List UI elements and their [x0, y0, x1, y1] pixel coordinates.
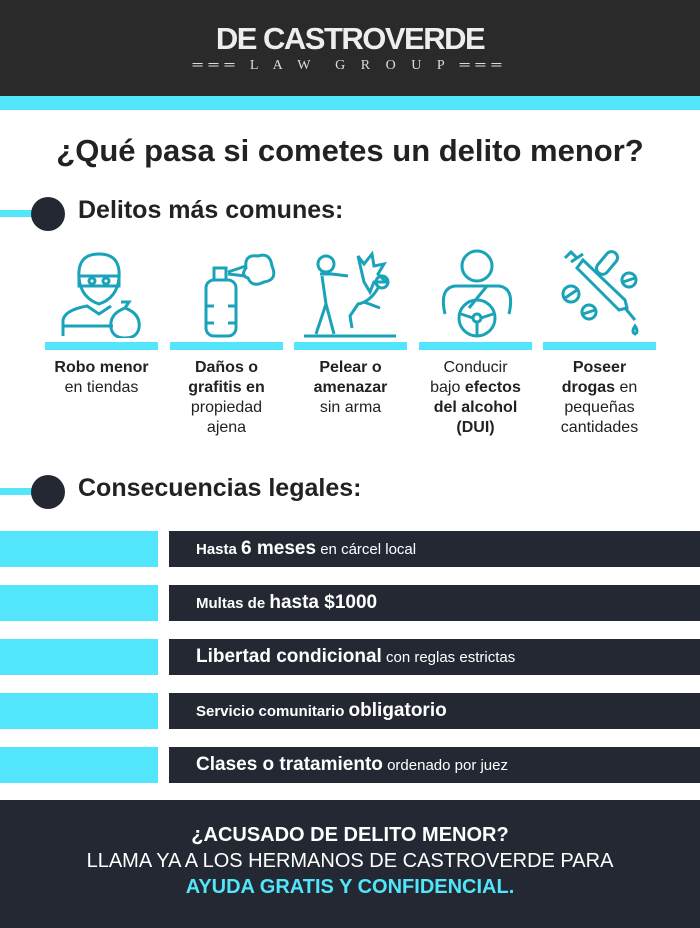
row 1: Hasta 6 meses en cárcel local: [196, 538, 416, 559]
item: drogas: [543, 250, 656, 436]
item: daños: grafitis en: [188, 379, 265, 396]
section heading: delitos: [0, 196, 343, 231]
icon: thief: [62, 252, 141, 338]
call to action: LLAMA YA A LOS HERMANOS DE CASTROVERDE PARA: [87, 850, 613, 872]
logo: ═══ L A W G R O U P ═══: [193, 58, 507, 73]
item: robo: [45, 252, 158, 396]
item: daños: Daños o: [195, 359, 258, 376]
row 2: Multas de hasta $1000: [196, 592, 377, 613]
row 1: [0, 531, 700, 567]
item: drogas: pequeñas: [564, 399, 635, 416]
section heading: consecuencias: Consecuencias legales:: [78, 474, 361, 502]
icon: syringe and pills: [562, 250, 638, 336]
item: pelear: amenazar: [314, 379, 387, 396]
item: drogas: Poseer: [573, 359, 626, 376]
item: pelear: Pelear o: [319, 359, 382, 376]
item: daños: ajena: [207, 419, 246, 436]
logo: [192, 21, 507, 73]
row 4: Servicio comunitario obligatorio: [196, 700, 447, 721]
item: daños: propiedad: [191, 399, 262, 416]
item: robo: en tiendas: [65, 379, 138, 396]
row 3: [0, 639, 700, 675]
logo: DE CASTROVERDE: [216, 21, 484, 56]
item: DUI: [419, 250, 532, 436]
footer: [0, 800, 700, 928]
item: daños: [170, 254, 283, 436]
icon: spray can: [204, 254, 276, 338]
row 3: Libertad condicional con reglas estrictas: [196, 646, 515, 667]
call to action: AYUDA GRATIS Y CONFIDENCIAL.: [186, 876, 514, 898]
item: drogas: drogas en: [562, 379, 637, 396]
item: robo: Robo menor: [54, 359, 149, 376]
call to action: [87, 824, 614, 898]
section heading: consecuencias: [0, 474, 361, 509]
item: DUI: Conducir: [443, 359, 508, 376]
row 5: Clases o tratamiento ordenado por juez: [196, 754, 508, 775]
icon: driver: [442, 250, 512, 338]
item: pelear: sin arma: [320, 399, 381, 416]
row 4: [0, 693, 700, 729]
icon: fight: [304, 250, 396, 338]
section heading: delitos: Delitos más comunes:: [78, 196, 343, 224]
header: [0, 0, 700, 96]
call to action: ¿ACUSADO DE DELITO MENOR?: [191, 824, 509, 846]
item: pelear: [294, 250, 407, 416]
item: DUI: bajo efectos: [430, 379, 521, 396]
item: DUI: del alcohol: [434, 399, 517, 416]
row 5: [0, 747, 700, 783]
item: DUI: (DUI): [456, 419, 495, 436]
item: drogas: cantidades: [561, 419, 638, 436]
row 2: [0, 585, 700, 621]
title: ¿Qué pasa si cometes un delito menor?: [56, 133, 644, 168]
